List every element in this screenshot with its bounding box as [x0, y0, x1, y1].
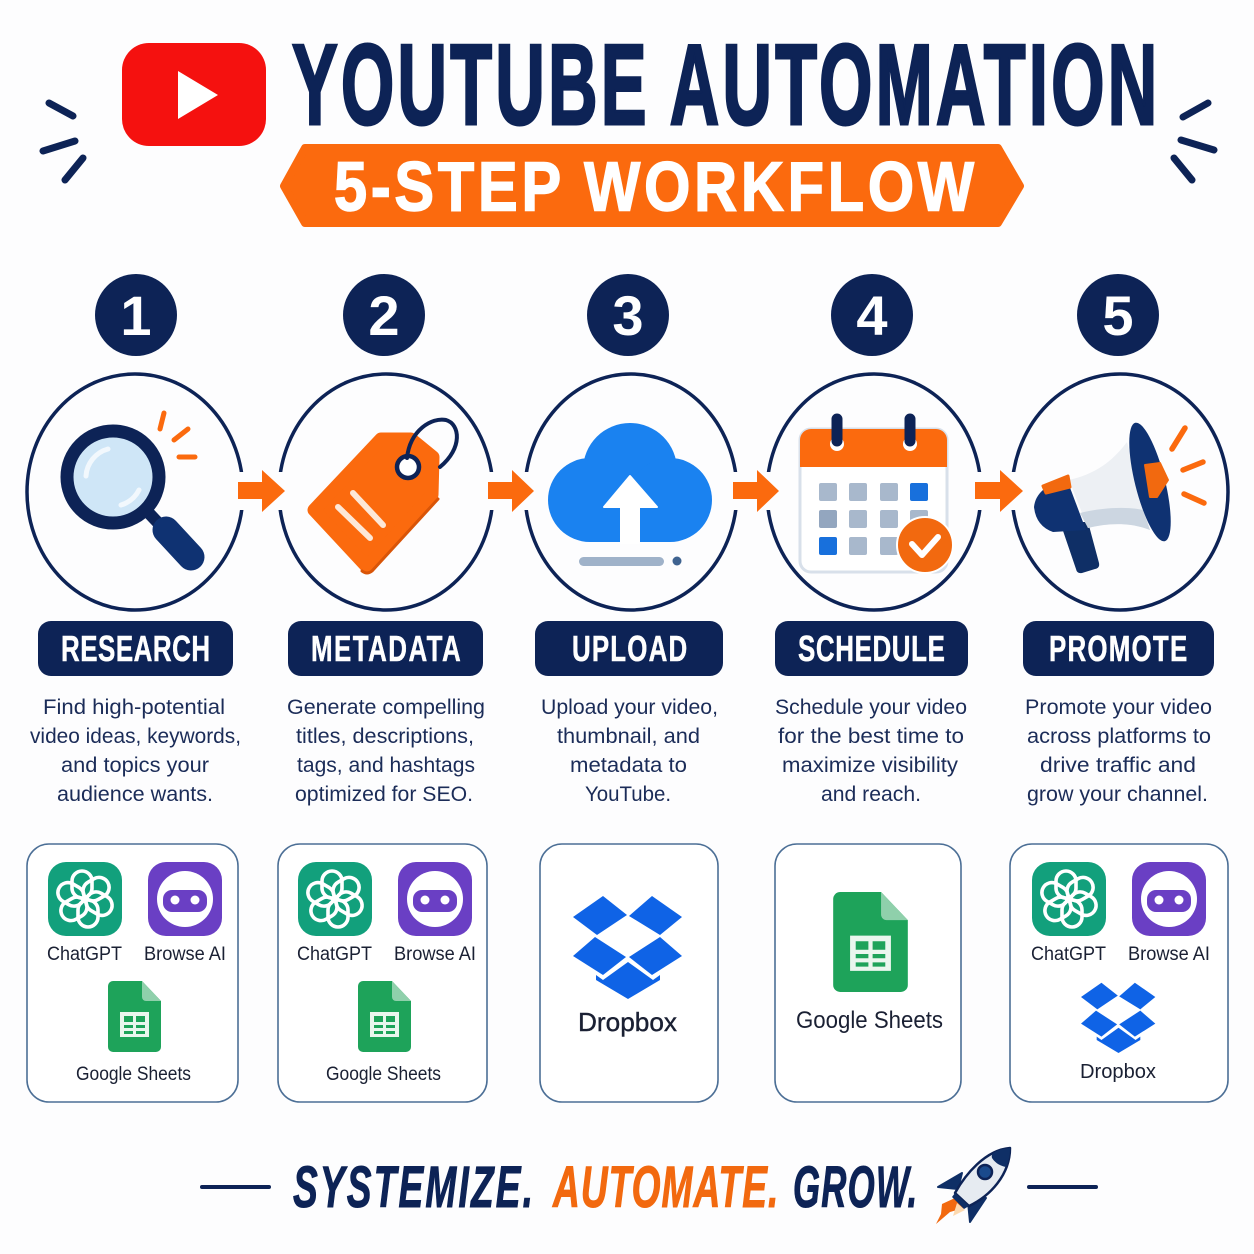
- arrow 1 to 2: [234, 470, 288, 512]
- description 4: and reach.: [821, 782, 921, 806]
- description 4: Schedule your video: [775, 695, 967, 719]
- step 5: promote: [1010, 274, 1228, 1102]
- Browse AI tool: [394, 862, 476, 965]
- tagline: grow: GROW.: [793, 1156, 917, 1220]
- description 3: [541, 695, 718, 806]
- tagline: automate: AUTOMATE.: [552, 1156, 778, 1220]
- description 4: maximize visibility: [782, 753, 958, 777]
- number badge 1: [95, 274, 177, 356]
- ChatGPT tool: ChatGPT: [297, 944, 372, 965]
- description 2: titles, descriptions,: [296, 724, 474, 748]
- step 3: upload: [525, 274, 737, 1102]
- icon: price tag: [314, 420, 457, 573]
- description 1: and topics your: [61, 753, 209, 777]
- label: promote: [1023, 621, 1214, 676]
- description 2: tags, and hashtags: [297, 753, 475, 777]
- ChatGPT tool: ChatGPT: [47, 944, 122, 965]
- number badge 4: [831, 274, 913, 356]
- step 2: metadata: [278, 274, 493, 1102]
- description 5: grow your channel.: [1027, 782, 1208, 806]
- icon: right burst lines: [1174, 103, 1214, 180]
- icon: left burst lines: [43, 103, 83, 180]
- description 5: drive traffic and: [1040, 753, 1196, 777]
- circle frame 1: [27, 374, 243, 610]
- label: metadata: [288, 621, 483, 676]
- number badge 4: 4: [856, 284, 888, 347]
- tools panel 4: [775, 844, 961, 1102]
- arrow 3 to 4: [728, 470, 779, 512]
- description 3: thumbnail, and: [557, 724, 700, 748]
- ChatGPT tool: [1031, 862, 1106, 965]
- Google Sheets tool: [326, 981, 441, 1085]
- description 1: video ideas, keywords,: [30, 724, 241, 748]
- ChatGPT tool: [297, 862, 372, 965]
- description 4: for the best time to: [778, 724, 964, 748]
- Browse AI tool: Browse AI: [1128, 944, 1210, 965]
- circle frame 3: [525, 374, 737, 610]
- Dropbox tool: Dropbox: [1080, 1061, 1156, 1083]
- step 4: schedule: [767, 274, 981, 1102]
- label: metadata: METADATA: [311, 629, 461, 669]
- description 1: Find high-potential: [43, 695, 225, 719]
- number badge 1: 1: [120, 284, 152, 347]
- title: YOUTUBE AUTOMATION: [292, 21, 1157, 148]
- number badge 5: [1077, 274, 1159, 356]
- circle frame 4: [767, 374, 981, 610]
- header: [43, 21, 1214, 226]
- Browse AI tool: [1128, 862, 1210, 965]
- right rule: [1027, 1185, 1098, 1189]
- footer tagline: [200, 1148, 1098, 1224]
- Dropbox tool: Dropbox: [578, 1007, 677, 1037]
- circle frame 5: [1012, 374, 1228, 610]
- Browse AI tool: Browse AI: [144, 944, 226, 965]
- tools panel 1: [27, 844, 238, 1102]
- tools panel 5: [1010, 844, 1228, 1102]
- tools panel 3: [540, 844, 718, 1102]
- arrow 2 to 3: [484, 470, 534, 512]
- Google Sheets tool: Google Sheets: [796, 1007, 943, 1034]
- Google Sheets tool: [796, 892, 943, 1034]
- description 2: optimized for SEO.: [295, 782, 473, 806]
- step 1: research: [27, 274, 243, 1102]
- Google Sheets tool: Google Sheets: [76, 1064, 191, 1085]
- circle frame 2: [279, 374, 493, 610]
- description 3: YouTube.: [585, 782, 671, 806]
- icon: cloud upload: [548, 423, 712, 566]
- ChatGPT tool: ChatGPT: [1031, 944, 1106, 965]
- tagline: systemize: SYSTEMIZE.: [293, 1156, 533, 1220]
- description 3: metadata to: [570, 753, 687, 777]
- description 3: Upload your video,: [541, 695, 718, 719]
- subtitle banner: 5-STEP WORKFLOW: [334, 147, 975, 226]
- label: research: RESEARCH: [61, 629, 210, 669]
- Google Sheets tool: [76, 981, 191, 1085]
- Dropbox tool: [1080, 983, 1156, 1083]
- ChatGPT tool: [47, 862, 122, 965]
- number badge 5: 5: [1102, 284, 1134, 347]
- label: research: [38, 621, 233, 676]
- label: upload: [535, 621, 723, 676]
- description 4: [775, 695, 967, 806]
- label: schedule: [775, 621, 968, 676]
- description 1: audience wants.: [57, 782, 213, 806]
- label: upload: UPLOAD: [572, 629, 687, 669]
- description 5: across platforms to: [1027, 724, 1211, 748]
- Browse AI tool: Browse AI: [394, 944, 476, 965]
- label: promote: PROMOTE: [1049, 629, 1187, 669]
- description 5: Promote your video: [1025, 695, 1212, 719]
- arrow 4 to 5: [972, 470, 1023, 512]
- icon: YouTube logo: [122, 43, 266, 146]
- icon: calendar with check: [800, 419, 953, 573]
- number badge 3: [587, 274, 669, 356]
- number badge 2: 2: [368, 284, 400, 347]
- tools panel 2: [278, 844, 487, 1102]
- description 2: Generate compelling: [287, 695, 485, 719]
- number badge 2: [343, 274, 425, 356]
- label: schedule: SCHEDULE: [798, 629, 945, 669]
- icon: rocket: [936, 1148, 1010, 1224]
- icon: megaphone: [1034, 419, 1204, 573]
- Google Sheets tool: Google Sheets: [326, 1064, 441, 1085]
- left rule: [200, 1185, 271, 1189]
- Dropbox tool: [573, 896, 682, 1037]
- icon: magnifying glass: [67, 413, 195, 557]
- description 1: [30, 695, 241, 806]
- Browse AI tool: [144, 862, 226, 965]
- description 5: [1025, 695, 1212, 806]
- description 2: [287, 695, 485, 806]
- number badge 3: 3: [612, 284, 644, 347]
